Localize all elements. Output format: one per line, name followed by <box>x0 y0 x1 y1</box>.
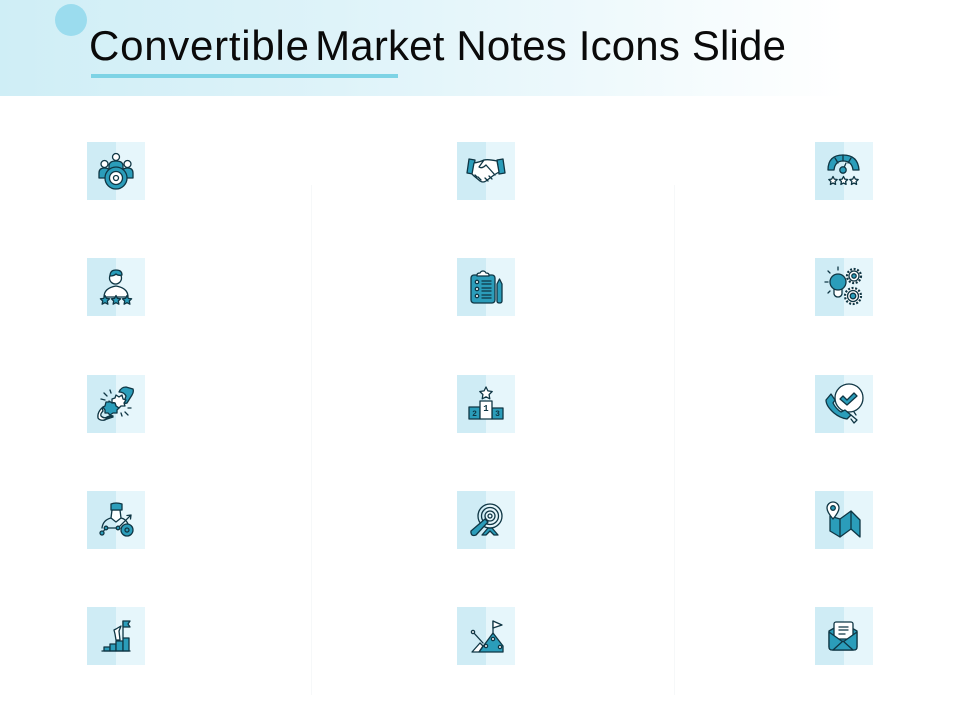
icon: person with three stars <box>87 258 145 316</box>
decorative circle <box>55 4 87 36</box>
icon: phone with check mark <box>815 375 873 433</box>
icon: podium with star <box>457 375 515 433</box>
icon: map with pin <box>815 491 873 549</box>
icon: podium with star: 3 <box>495 410 500 419</box>
icon: hands joining puzzle pieces <box>87 375 145 433</box>
icon: person climbing steps to flag <box>87 607 145 665</box>
icon: clipboard checklist with pencil <box>457 258 515 316</box>
icon: gauge with stars <box>815 142 873 200</box>
icon: podium with star: 2 <box>472 410 477 419</box>
icon: podium with star: 1 <box>483 404 489 414</box>
icon: mountain with flag <box>457 607 515 665</box>
title: Convertible Market Notes Icons Slide <box>89 22 786 69</box>
icon: team with target <box>87 142 145 200</box>
icon: open envelope with letter <box>815 607 873 665</box>
header band <box>0 0 960 96</box>
icon: handshake <box>457 142 515 200</box>
icon: light bulb with gears <box>815 258 873 316</box>
icon: person with growth path and coin <box>87 491 145 549</box>
title underline <box>91 74 398 78</box>
icon: target with dart <box>457 491 515 549</box>
